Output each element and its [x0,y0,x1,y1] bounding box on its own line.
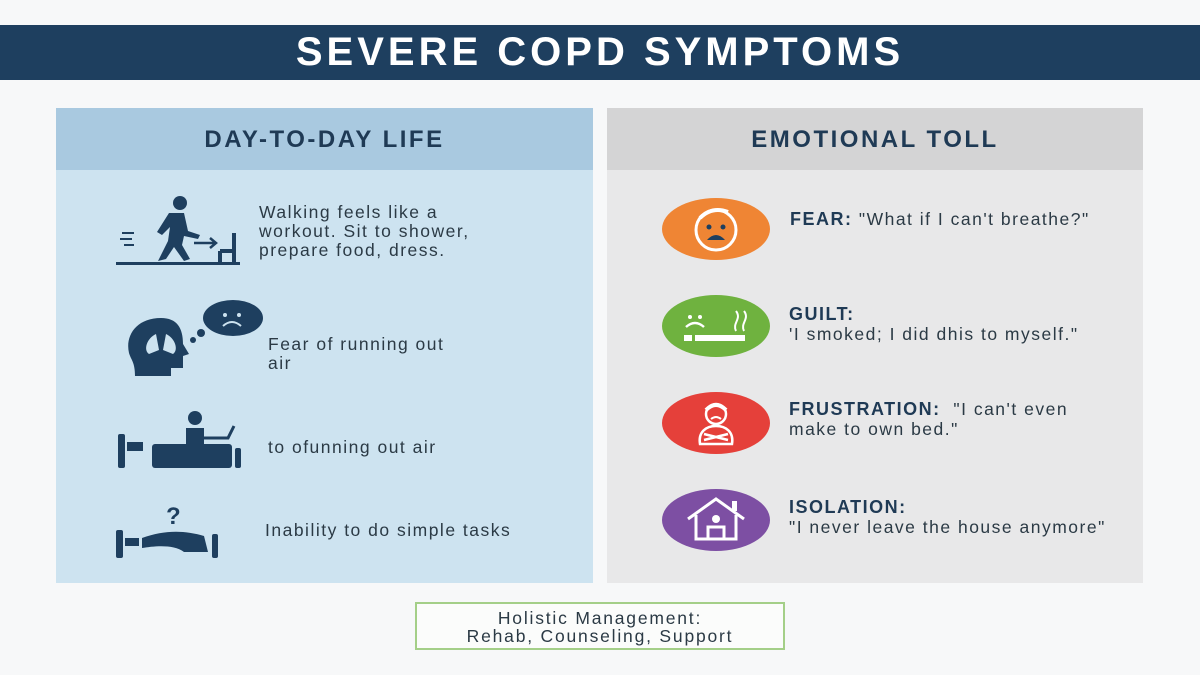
icon: fear face [662,198,770,260]
text: isolation [789,497,1106,537]
text: isolation: ISOLATION: [789,497,907,517]
callout: holistic management: Rehab, Counseling, Support [467,626,733,646]
text: guilt: 'I smoked; I did dhis to myself." [789,324,1079,344]
text: isolation: "I never leave the house anymore" [789,517,1106,537]
icon: isolation house [662,489,770,551]
heading: emotional toll [607,108,1143,170]
text: guilt: GUILT: [789,304,855,324]
text: frustration: FRUSTRATION: "I can't even make to own bed." [789,399,1068,439]
icon: bed with question mark: ? [166,503,181,530]
icon: head with lungs and worried thought [128,300,263,376]
callout: holistic management: Holistic Management: [498,608,702,628]
callout: holistic management [415,602,785,650]
text: to of running out air: to ofunning out air [268,437,437,457]
icon: frustration [662,392,770,454]
text: inability: Inability to do simple tasks [265,520,511,540]
text: fear: FEAR: "What if I can't breathe?" [790,209,1090,229]
text: fear of running out: Fear of running out air [268,334,444,373]
heading: day-to-day life [56,108,593,170]
icon: person in bed with laptop [118,411,241,468]
icon: guilt cigarette [662,295,770,357]
panel: day-to-day life [56,108,593,583]
heading: emotional toll: EMOTIONAL TOLL [751,126,999,153]
text: guilt [789,304,1079,344]
panel: emotional toll [607,108,1143,583]
icon: walking to chair [116,196,240,265]
text: walking: Walking feels like a workout. Sit to shower, prepare food, dress. [259,202,470,260]
title bar [0,25,1200,80]
icon: bed with question mark [116,503,218,558]
heading: day-to-day life: DAY-TO-DAY LIFE [204,126,445,153]
title bar: SEVERE COPD SYMPTOMS [296,30,904,74]
